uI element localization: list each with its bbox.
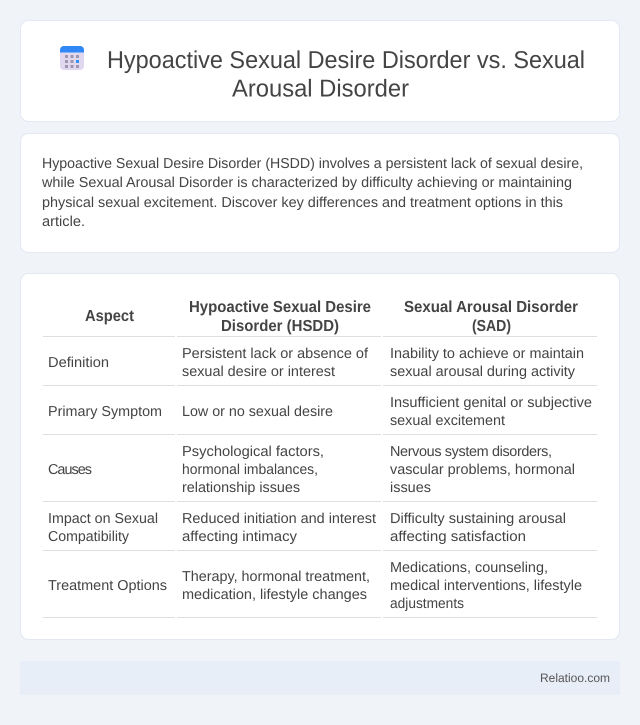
- row: impact on sexual compatibility: Reduced initiation and interest: [182, 511, 376, 527]
- row: impact on sexual compatibility: Compatibility: [48, 529, 130, 545]
- table header: Aspect: [85, 308, 135, 325]
- panel: comparison table: [20, 274, 620, 640]
- row: causes: issues: [390, 480, 431, 496]
- header panel: [20, 20, 620, 122]
- row: primary symptom: Insufficient genital or subjective: [390, 395, 592, 411]
- title: Hypoactive Sexual Desire Disorder vs. Sexual: [107, 47, 585, 74]
- row: primary symptom: sexual excitement: [390, 413, 505, 429]
- table header: [85, 299, 578, 335]
- table header: Sexual Arousal Disorder: [404, 299, 578, 316]
- row: treatment options: [48, 560, 582, 612]
- icon: calendar: [60, 46, 84, 70]
- row: treatment options: adjustments: [390, 596, 464, 612]
- row: causes: Psychological factors,: [182, 444, 324, 460]
- row: primary symptom: Primary Symptom: [48, 404, 162, 420]
- table header: Disorder (HSDD): [221, 318, 339, 335]
- row: primary symptom: [48, 395, 592, 429]
- footer: Relatioo.com: [540, 671, 610, 685]
- row: causes: hormonal imbalances,: [182, 462, 318, 478]
- row: definition: sexual arousal during activity: [390, 364, 576, 380]
- panel: introduction: [20, 134, 620, 252]
- row: causes: Causes: [48, 462, 92, 478]
- row: treatment options: Treatment Options: [48, 578, 167, 594]
- row: definition: Definition: [48, 355, 109, 371]
- intro text: article.: [42, 214, 85, 230]
- row: causes: vascular problems, hormonal: [390, 462, 575, 478]
- row: impact on sexual compatibility: Impact on Sexual: [48, 511, 158, 527]
- row: causes: relationship issues: [182, 480, 300, 496]
- intro text: Hypoactive Sexual Desire Disorder (HSDD) involves a persistent lack of sexual desire,: [42, 156, 583, 172]
- row: impact on sexual compatibility: affecting intimacy: [182, 529, 298, 545]
- intro text: while Sexual Arousal Disorder is characterized by difficulty achieving or maintaining: [41, 175, 572, 191]
- table header: (SAD): [472, 318, 511, 335]
- footer: [20, 661, 620, 695]
- row: treatment options: Medications, counseling,: [390, 560, 548, 576]
- row: treatment options: Therapy, hormonal treatment,: [182, 569, 370, 585]
- intro text: physical sexual excitement. Discover key differences and treatment options in this: [42, 195, 563, 211]
- intro text: [41, 156, 583, 230]
- row: definition: Inability to achieve or maintain: [390, 346, 584, 362]
- title: Arousal Disorder: [232, 76, 409, 102]
- row: causes: [48, 444, 575, 496]
- row: definition: sexual desire or interest: [182, 364, 335, 380]
- row: impact on sexual compatibility: affecting satisfaction: [390, 529, 526, 545]
- title: [107, 47, 585, 102]
- row: primary symptom: Low or no sexual desire: [182, 404, 333, 420]
- row: impact on sexual compatibility: [48, 511, 566, 545]
- row: treatment options: medication, lifestyle changes: [182, 587, 367, 603]
- row: treatment options: medical interventions, lifestyle: [390, 578, 582, 594]
- row: impact on sexual compatibility: Difficulty sustaining arousal: [390, 511, 566, 527]
- row: definition: Persistent lack or absence of: [182, 346, 369, 362]
- table header: Hypoactive Sexual Desire: [189, 299, 371, 316]
- row: definition: [48, 346, 584, 380]
- row: causes: Nervous system disorders,: [390, 444, 552, 460]
